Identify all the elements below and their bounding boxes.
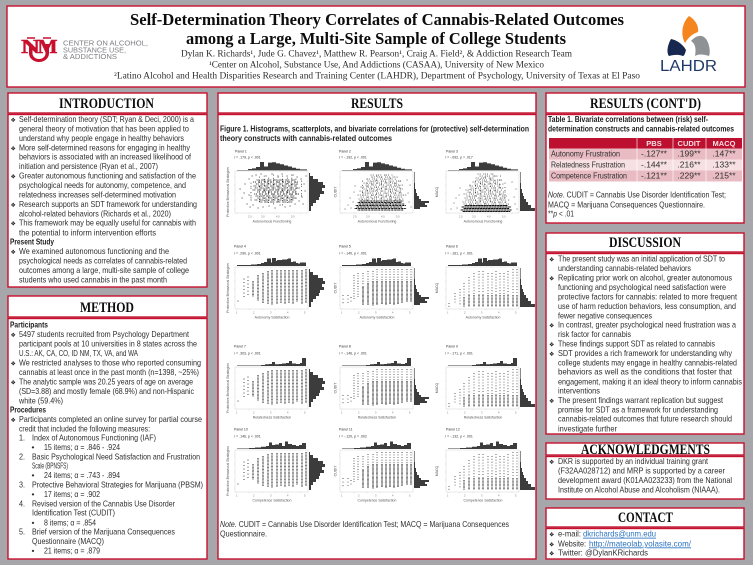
results body box xyxy=(218,114,536,559)
figure caption: theory constructs with cannabis-related outcomes xyxy=(220,133,392,143)
chart: panel 10: Panel 10 xyxy=(234,428,248,432)
chart: panel 7 xyxy=(226,344,325,420)
text block: discussion xyxy=(546,254,744,434)
text block: method: ❖ xyxy=(10,360,16,367)
text block: method: cannabis at least once in the past month (n=1398, ~25%) xyxy=(19,367,199,377)
text block: method: 3. xyxy=(19,480,25,490)
chart: panel 4: Autonomy Satisfaction xyxy=(255,316,289,320)
text block: method: 8 items; α = .854 xyxy=(44,517,96,527)
text block: introduction: This framework may be equally useful for cannabis with xyxy=(19,218,196,228)
chart: panel 8: Relatedness Satisfaction xyxy=(358,416,396,420)
heading: method xyxy=(8,296,207,317)
text block: introduction: Research supports an SDT framework for understanding xyxy=(19,199,197,209)
panel: introduction xyxy=(8,93,207,287)
text block: method: 1. xyxy=(19,433,25,443)
logo: UNM center: & ADDICTIONS xyxy=(63,54,117,61)
heading: results continued xyxy=(546,93,744,113)
text block: introduction: Present Study xyxy=(10,237,54,247)
text block: discussion: These findings support SDT as related to cannabis xyxy=(558,338,715,348)
text block: method: Identification Test (CUDIT) xyxy=(32,508,115,518)
text block: method: ❖ xyxy=(10,379,16,386)
logo: UNM center: M xyxy=(38,36,58,58)
table: correlations: MACQ xyxy=(713,139,736,148)
text block: method: 2. xyxy=(19,451,25,461)
chart: panel 3: Panel 3 xyxy=(446,150,458,154)
text block: method: Protective Behavioral Strategies for Marijuana (PBSM) xyxy=(32,480,203,490)
text block: discussion: ❖ xyxy=(549,323,554,330)
table: correlations: Autonomy Frustration xyxy=(551,149,620,159)
chart: panel 1 xyxy=(226,150,325,224)
chart: panel 4 xyxy=(226,244,325,320)
text block: introduction: psychological needs for autonomy, competence, and xyxy=(19,180,186,190)
text block: introduction: the potential to inform intervention efforts xyxy=(19,227,156,237)
table: correlations: CUDIT xyxy=(678,139,701,148)
text block: discussion: functioning and psychological need satisfaction were xyxy=(558,282,726,292)
text block: discussion: The present findings warrant replication but suggest xyxy=(558,395,724,405)
text block: method: 21 items; α = .879 xyxy=(44,545,100,555)
chart: panel 2: Panel 2 xyxy=(339,150,351,154)
text block: method: • xyxy=(32,470,34,480)
chart: panel 10 xyxy=(226,428,325,502)
text block: contact: dkrichards@unm.edu xyxy=(583,529,656,539)
chart: panel 10: r = .146, p < .001 xyxy=(234,434,261,438)
chart: panel 12: Competence Satisfaction xyxy=(464,498,503,502)
heading: acknowledgments: ACKNOWLEDGMENTS xyxy=(581,442,710,458)
chart: panel 11 xyxy=(334,428,429,502)
chart: panel 8 xyxy=(334,344,429,420)
text block: introduction: ❖ xyxy=(10,145,16,152)
chart: panel 11: Competence Satisfaction xyxy=(358,498,397,502)
text block: method: Basic Psychological Need Satisfaction and Frustration xyxy=(32,451,200,461)
chart: panel 9: Relatedness Satisfaction xyxy=(464,416,502,420)
chart: panel 9: MACQ xyxy=(435,382,439,393)
text block: acknowledgments: (F32AA028712) and MRP is supported by a career xyxy=(558,466,725,476)
figure caption: Figure 1. Histograms, scatterplots, and bivariate correlations for (protective) self-determination xyxy=(220,124,529,134)
chart: panel 1: Panel 1 xyxy=(235,150,247,154)
chart: panel 7: Panel 7 xyxy=(234,344,246,348)
chart: panel 4: Panel 4 xyxy=(234,244,246,248)
chart: panel 6: Panel 6 xyxy=(446,244,458,248)
text block: introduction: ❖ xyxy=(10,174,16,181)
text block: method: (SD=3.88) and mostly female (68.9%) and non-Hispanic xyxy=(19,386,195,396)
results continued body box xyxy=(546,114,744,223)
text block: method: Index of Autonomous Functioning (IAF) xyxy=(32,433,156,443)
table: correlations: .147** xyxy=(712,149,736,159)
text block: method: Scale (BPNSFS) xyxy=(32,461,68,471)
text block: contact: Website: xyxy=(558,538,586,548)
chart: panel 3: MACQ xyxy=(435,186,439,197)
text block: method: Participants xyxy=(10,319,48,329)
text block: discussion: investigate further xyxy=(558,423,617,433)
text block: contact: ❖ xyxy=(549,532,554,539)
chart: panel 5 xyxy=(334,244,429,320)
text block: method: ❖ xyxy=(10,417,16,424)
text block: contact: http://mateolab.yolasite.com/ xyxy=(589,538,692,548)
chart: panel 3: Autonomous Functioning xyxy=(464,220,502,224)
text block: method: Procedures xyxy=(10,405,46,415)
figure note xyxy=(220,519,509,539)
text block: method: 15 items; α = .846 - .924 xyxy=(44,442,120,452)
text block: method: 4. xyxy=(19,498,25,508)
heading: contact: CONTACT xyxy=(618,510,673,526)
text block: acknowledgments: ❖ xyxy=(549,459,554,466)
text block: method: ❖ xyxy=(10,332,16,339)
text block: introduction: understand why people engage in healthy behaviors xyxy=(19,133,184,143)
chart: panel 1: r = .179, p < .001 xyxy=(234,156,261,160)
heading: results: RESULTS xyxy=(351,96,403,112)
chart: panel 7: Relatedness Satisfaction xyxy=(253,416,291,420)
text block: method: We restricted analyses to those who reported consuming xyxy=(19,357,201,367)
text block: contact: ❖ xyxy=(549,541,554,548)
text block: method: white (59.4%) xyxy=(18,395,63,405)
text block: method: Participants completed an online survey for partial course xyxy=(19,414,202,424)
heading: introduction: INTRODUCTION xyxy=(59,96,154,112)
heading: results xyxy=(218,93,536,113)
text block: discussion: risk factor for cannabis xyxy=(558,329,631,339)
table note: **p < .01 xyxy=(548,209,574,219)
chart: panel 1: Autonomous Functioning xyxy=(253,220,291,224)
text block: method: 24 items; α = .743 - .894 xyxy=(44,470,120,480)
authors and affiliations: Dylan K. Richards¹, Jude G. Chavez¹, Matthew R. Pearson¹, Craig A. Field², & Addiction Research Team xyxy=(181,48,572,58)
table note: MACQ = Marijuana Consequences Questionnaire. xyxy=(548,199,705,209)
heading: method: METHOD xyxy=(80,300,134,316)
table: correlations: -.144** xyxy=(641,160,668,170)
panel: contact xyxy=(546,508,744,559)
text block: introduction: general theory of motivation that has been applied to xyxy=(19,124,189,134)
text block: method: • xyxy=(32,545,34,555)
table: correlations: .133** xyxy=(712,160,736,170)
chart: panel 6: r = -.161, p < .001 xyxy=(445,252,473,256)
text block: discussion: ❖ xyxy=(549,276,554,283)
table: correlations: .215** xyxy=(712,171,736,181)
text block: method: 17 items; α = .902 xyxy=(44,489,100,499)
chart: panel 8: Panel 8 xyxy=(339,344,351,348)
chart: panel 1: Protective Behavioral Strategies xyxy=(226,167,230,217)
text block: discussion: fewer negative consequences xyxy=(558,310,652,320)
chart: panel 11: Panel 11 xyxy=(339,428,353,432)
chart: panel 7: r = .303, p < .001 xyxy=(234,352,261,356)
text block: discussion: ❖ xyxy=(549,341,554,348)
chart: panel 5: r = -.140, p < .001 xyxy=(339,252,367,256)
text block: introduction: ❖ xyxy=(10,117,16,124)
table: correlations: Relatedness Frustration xyxy=(551,160,625,170)
heading: discussion xyxy=(546,233,744,252)
chart: panel 10: Competence Satisfaction xyxy=(253,498,292,502)
logo: LAHDR: LAHDR xyxy=(660,58,717,75)
heading: contact xyxy=(546,508,744,527)
text block: discussion: promise for SDT as a framework for understanding xyxy=(558,404,718,414)
figure note: Questionnaire. xyxy=(220,529,267,539)
text block: method: • xyxy=(32,517,34,527)
text block: introduction: outcomes among a large, multi-site sample of college xyxy=(19,265,189,275)
header panel xyxy=(7,6,745,87)
text block: discussion: ❖ xyxy=(549,398,554,405)
text block: method: • xyxy=(32,442,34,452)
text block: contact: e-mail: xyxy=(558,529,581,539)
table note xyxy=(548,190,726,219)
text block: introduction: ❖ xyxy=(10,221,16,228)
text block: introduction: More self-determined reasons for engaging in healthy xyxy=(19,142,191,152)
text block: acknowledgments xyxy=(546,456,744,499)
panel: discussion xyxy=(546,233,744,434)
chart: panel 6 xyxy=(435,244,535,320)
chart: panel 5: CUDIT xyxy=(334,282,338,293)
chart: panel 5: Autonomy Satisfaction xyxy=(360,316,394,320)
text block: method: Questionnaire (MACQ) xyxy=(32,536,104,546)
text block: introduction: relatedness increases self-determined motivation xyxy=(19,190,176,200)
chart: panel 10: Protective Behavioral Strategies xyxy=(226,446,230,496)
chart: panel 9: Panel 9 xyxy=(446,344,458,348)
authors and affiliations: ¹Center on Alcohol, Substance Use, And Addictions (CASAA), University of New Mexico xyxy=(209,60,544,70)
text block: method: • xyxy=(32,489,34,499)
text block: introduction: psychological needs as correlates of cannabis-related xyxy=(19,256,187,266)
text block: discussion: ❖ xyxy=(549,351,554,358)
title: Self-Determination Theory Correlates of Cannabis-Related Outcomes xyxy=(130,10,624,29)
table caption xyxy=(548,114,734,134)
chart: panel 12 xyxy=(435,428,535,502)
logo: UNM center: N xyxy=(21,36,41,58)
heading: introduction xyxy=(8,93,207,113)
logo: UNM center: CENTER ON ALCOHOL, xyxy=(63,40,148,48)
text block: discussion: interventions xyxy=(558,386,600,396)
chart: panel 12: Panel 12 xyxy=(446,428,460,432)
text block: method: U.S.: AK, CA, CO, ID NM, TX, VA, and WA xyxy=(19,348,138,358)
chart: panel 8: CUDIT xyxy=(334,382,338,393)
chart: panel 3 xyxy=(435,150,535,224)
text block: introduction: behaviors is associated with an increased likelihood of xyxy=(19,152,192,162)
chart: panel 7: Protective Behavioral Strategies xyxy=(226,363,230,413)
table: correlations: .229** xyxy=(677,171,701,181)
text block: introduction: alcohol-related behaviors (Richards et al., 2020) xyxy=(19,208,171,218)
chart: panel 4: r = .290, p < .001 xyxy=(234,252,261,256)
chart: panel 2: Autonomous Functioning xyxy=(358,220,396,224)
text block: introduction: Self-determination theory (SDT; Ryan & Deci, 2000) is a xyxy=(19,114,194,124)
text block: discussion: behaviors as well as the conditions that foster that xyxy=(558,367,733,377)
chart: panel 2 xyxy=(334,150,429,224)
panel: results continued xyxy=(546,93,744,223)
text block: method: Brief version of the Marijuana Consequences xyxy=(32,527,175,537)
text block: contact xyxy=(546,528,744,559)
table: correlations: PBS xyxy=(646,139,662,148)
table: correlations: .199** xyxy=(677,149,701,159)
text block: contact: Twitter: @DylanKRichards xyxy=(558,548,648,558)
chart: panel 9 xyxy=(435,344,535,420)
text block: introduction: Greater autonomous functioning and satisfaction of the xyxy=(19,171,196,181)
chart: panel 11: r = -.120, p = .002 xyxy=(339,434,367,438)
chart: panel 6: MACQ xyxy=(435,282,439,293)
chart: panel 2: CUDIT xyxy=(334,186,338,197)
figure note: Note. CUDIT = Cannabis Use Disorder Identification Test; MACQ = Marijuana Consequences xyxy=(220,519,509,529)
title xyxy=(130,10,624,48)
panel: acknowledgments xyxy=(546,442,744,499)
chart: panel 11: CUDIT xyxy=(334,465,338,476)
table: correlations: Competence Frustration xyxy=(551,171,627,181)
chart: panel 2: r = -.192, p < .001 xyxy=(339,156,367,160)
chart: panel 12: r = -.132, p < .001 xyxy=(445,434,473,438)
text block: introduction: students who used cannabis in the past month xyxy=(19,274,167,284)
text block: discussion: understanding cannabis-related behaviors xyxy=(558,263,691,273)
text block: introduction: We examined autonomous functioning and the xyxy=(19,246,169,256)
chart: panel 5: Panel 5 xyxy=(339,244,351,248)
text block: method: credit that included the following measures: xyxy=(19,423,150,433)
chart: panel 8: r = -.146, p < .001 xyxy=(339,352,367,356)
chart: panel 9: r = -.171, p < .001 xyxy=(445,352,473,356)
table caption: Table 1. Bivariate correlations between (risk) self- xyxy=(548,114,708,124)
table: correlations: -.121** xyxy=(641,171,668,181)
chart: panel 3: r = -.092, p = .017 xyxy=(445,156,473,160)
heading: discussion: DISCUSSION xyxy=(609,235,681,251)
logo: UNM center: SUBSTANCE USE, xyxy=(63,48,126,54)
text block: method xyxy=(8,318,207,559)
text block: acknowledgments: Institute on Alcohol Abuse and Alcoholism (NIAAA). xyxy=(558,485,720,495)
authors and affiliations: ²Latino Alcohol and Health Disparities Research and Training Center (LAHDR), Department of Psychology, University of Texas at El Paso xyxy=(114,70,641,80)
chart: panel 4: Protective Behavioral Strategies xyxy=(226,263,230,313)
text block: contact: ❖ xyxy=(549,551,554,558)
text block: discussion: ❖ xyxy=(549,257,554,264)
table: correlations: .216** xyxy=(677,160,701,170)
text block: method: participant pools at 10 universities in 8 states across the xyxy=(19,338,197,348)
text block: introduction: ❖ xyxy=(10,202,16,209)
text block: introduction xyxy=(8,114,207,287)
text block: method: Revised version of the Cannabis Use Disorder xyxy=(32,498,175,508)
authors and affiliations xyxy=(114,48,641,80)
text block: acknowledgments: DKR is supported by an individual training grant xyxy=(558,456,709,466)
chart: panel 6: Autonomy Satisfaction xyxy=(466,316,500,320)
table: correlations xyxy=(549,138,742,182)
text block: introduction: ❖ xyxy=(10,249,16,256)
title: among a Large, Multi-Site Sample of College Students xyxy=(186,29,566,48)
text block: method: 5. xyxy=(19,527,25,537)
text block: discussion: The present study was an initial application of SDT to xyxy=(558,254,725,264)
logo: LAHDR xyxy=(660,16,717,75)
panel: results xyxy=(218,93,536,559)
text block: introduction: initiation and persistence (Ryan et al., 2007) xyxy=(19,161,158,171)
text block: method: 5497 students recruited from Psychology Department xyxy=(19,329,190,339)
text block: method: The analytic sample was 20.25 years of age on average xyxy=(19,376,193,386)
panel: method xyxy=(8,296,207,559)
logo: UNM center xyxy=(21,36,148,62)
figure caption xyxy=(220,124,529,143)
chart: panel 12: MACQ xyxy=(435,465,439,476)
table: correlations: -.127** xyxy=(641,149,668,159)
heading: results continued: RESULTS (CONT'D) xyxy=(590,96,701,112)
